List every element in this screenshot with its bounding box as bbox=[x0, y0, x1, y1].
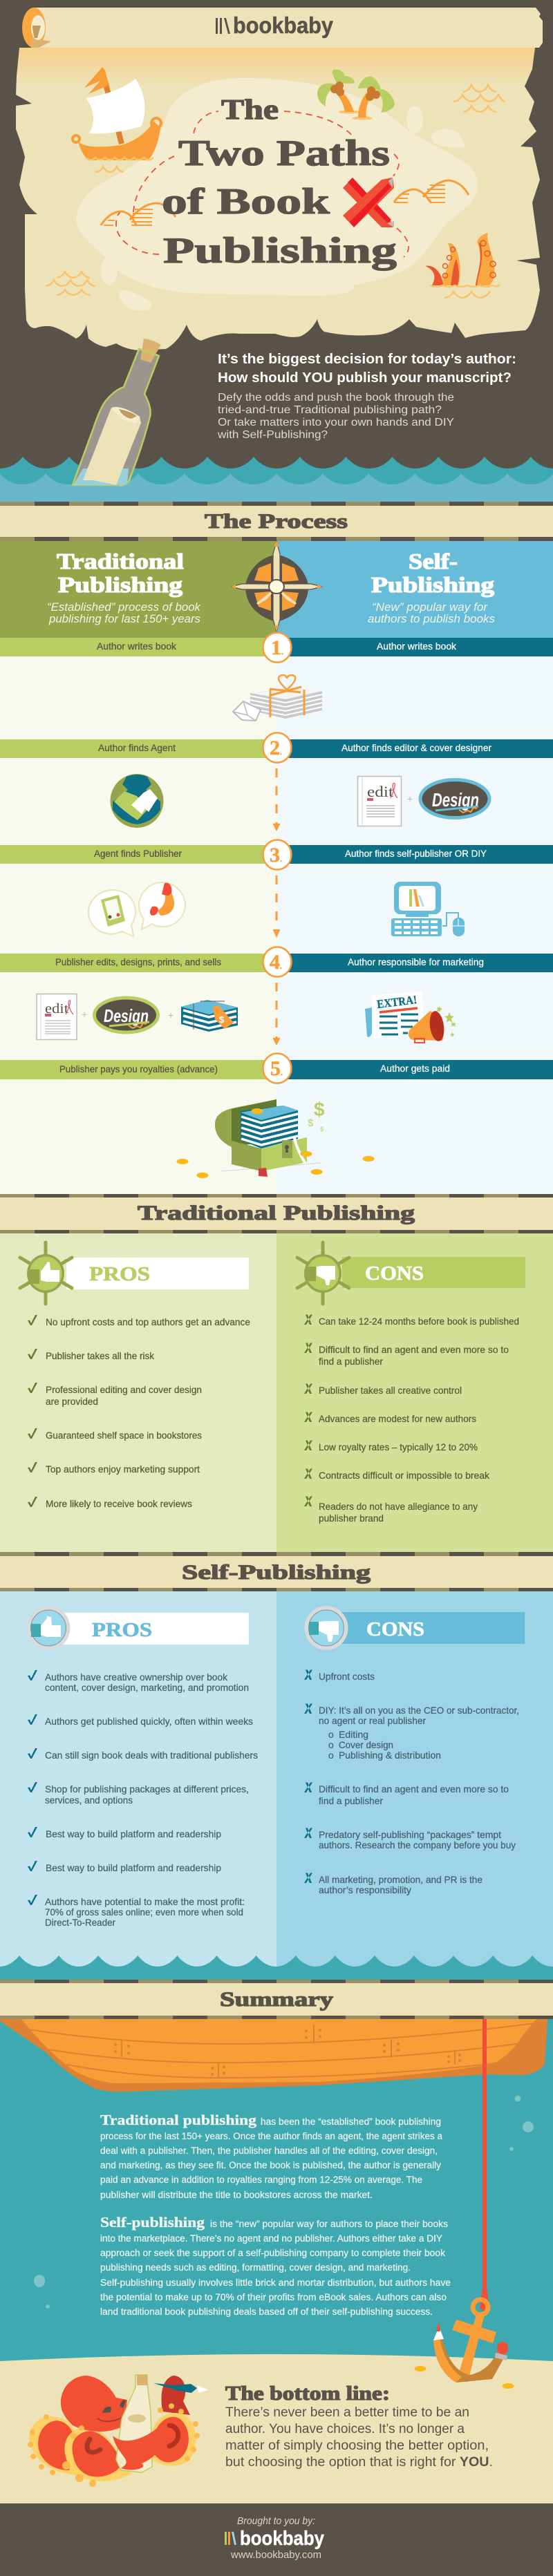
cons ribbon: CONS bbox=[365, 1262, 424, 1285]
con item: author’s responsibility bbox=[319, 1884, 411, 1895]
summary paragraph: self-publishing bbox=[100, 2214, 451, 2317]
icon: treasure chest with books: $ bbox=[314, 1099, 325, 1120]
con item: All marketing, promotion, and PR is the bbox=[319, 1874, 482, 1885]
summary paragraph: self-publishing: publishing needs such as editing, formatting, cover design, and marketing. bbox=[100, 2262, 411, 2273]
con item: Advances are modest for new authors bbox=[319, 1413, 476, 1424]
bottom line text: matter of simply choosing the better option, bbox=[225, 2438, 489, 2453]
cons ribbon: CONS bbox=[366, 1618, 424, 1640]
icon: anchor bbox=[433, 2300, 508, 2383]
step 2: 2. bbox=[270, 737, 282, 759]
banner: Summary bbox=[0, 1983, 553, 2016]
icon: edit page: edit bbox=[367, 783, 393, 800]
pro item: Authors have potential to make the most profit: bbox=[45, 1896, 245, 1907]
pro item: Best way to build platform and readership bbox=[46, 1828, 221, 1839]
pros ribbon: PROS bbox=[92, 1619, 152, 1641]
con item: publisher brand bbox=[319, 1513, 384, 1524]
con item: DIY: It’s all on you as the CEO or sub-contractor, bbox=[319, 1705, 519, 1716]
step 5: Publisher pays you royalties (advance) bbox=[59, 1063, 218, 1074]
icon: boat hull bbox=[0, 2019, 547, 2092]
step 3 bbox=[0, 840, 553, 869]
con item bbox=[304, 1497, 478, 1524]
con item: Publisher takes all creative control bbox=[319, 1385, 462, 1396]
plus: + bbox=[407, 793, 413, 804]
con item: authors. Research the company before you buy bbox=[319, 1839, 516, 1850]
bottom line text: There’s never been a better time to be an bbox=[225, 2405, 469, 2420]
icon: handshake bbox=[111, 774, 163, 828]
scroll top band bbox=[22, 8, 543, 48]
icon: ship wheel thumbs down bbox=[297, 1242, 349, 1304]
icon: porthole thumbs up bbox=[26, 1606, 71, 1650]
intro text block: How should YOU publish your manuscript? bbox=[218, 370, 512, 386]
pro item: Direct-To-Reader bbox=[45, 1917, 115, 1928]
summary paragraph: traditional: and marketing, as they see fit. Once the book is published, the author is generally bbox=[100, 2160, 441, 2170]
icon: design badge green bbox=[94, 998, 158, 1032]
pro item: No upfront costs and top authors get an advance bbox=[46, 1316, 250, 1327]
teal wave footer of self-publishing bbox=[0, 1955, 553, 1980]
step 4 bbox=[0, 947, 553, 977]
panel: traditional header bbox=[0, 541, 276, 638]
cons ribbon bbox=[342, 1257, 525, 1288]
panel: traditional header: “Established” process of book bbox=[47, 601, 201, 614]
icon: design badge: Design bbox=[432, 789, 479, 811]
summary paragraph: traditional: process for the last 150+ years. Once the author finds an agent, the agent strikes a bbox=[100, 2131, 442, 2141]
icon: kraken tentacles bbox=[425, 233, 499, 287]
island bbox=[76, 78, 478, 296]
banner: Summary: Summary bbox=[220, 1988, 333, 2011]
step 2: Author finds Agent bbox=[98, 742, 176, 753]
icon: manuscript with ribbon bbox=[233, 675, 322, 721]
summary paragraph: traditional: paid an advance in addition to royalties ranging from 12-25% on average. The bbox=[100, 2175, 422, 2185]
step 3: Agent finds Publisher bbox=[94, 848, 182, 859]
panel: traditional cons bbox=[276, 1233, 553, 1552]
parchment map bbox=[16, 48, 540, 350]
arrow: dashed 2 to 3 bbox=[273, 768, 280, 831]
brought to you by: Brought to you by: bbox=[237, 2515, 315, 2527]
summary paragraph: traditional bbox=[100, 2112, 442, 2200]
step 1 bbox=[0, 633, 553, 662]
icon: newspaper EXTRA bbox=[365, 991, 424, 1039]
pro item bbox=[28, 1670, 249, 1693]
bottom line text: but choosing the option that is right for YOU. bbox=[225, 2455, 493, 2470]
con item: Publishing & distribution bbox=[339, 1750, 441, 1761]
con item: Predatory self-publishing “packages” tempt bbox=[319, 1829, 501, 1840]
banner: The Process bbox=[0, 506, 553, 537]
step 3: Author finds self-publisher OR DIY bbox=[345, 848, 487, 859]
pro item: Top authors enjoy marketing support bbox=[46, 1464, 200, 1475]
cons ribbon bbox=[339, 1612, 525, 1644]
icon: design badge green: Design bbox=[104, 1005, 149, 1026]
banner: Self-Publishing: Self-Publishing bbox=[182, 1561, 371, 1584]
pro item: More likely to receive book reviews bbox=[46, 1498, 192, 1509]
step 1: Author writes book bbox=[377, 641, 457, 652]
summary paragraph: self-publishing: land traditional book publishing deals based off of their self-publishing success. bbox=[100, 2307, 433, 2317]
icon: palm trees bbox=[317, 70, 395, 120]
main title bbox=[162, 93, 397, 271]
con item: find a publisher bbox=[319, 1356, 383, 1367]
con item bbox=[304, 1704, 519, 1761]
main title: Publishing bbox=[163, 231, 397, 271]
website: www.bookbaby.com bbox=[230, 2549, 321, 2561]
bottom line text bbox=[225, 2383, 493, 2470]
dashed treasure route bbox=[116, 111, 409, 257]
step 2 bbox=[0, 732, 553, 763]
con item: Low royalty rates – typically 12 to 20% bbox=[319, 1441, 478, 1452]
pros ribbon bbox=[66, 1258, 249, 1289]
panel: self-publishing cons bbox=[276, 1591, 553, 1980]
ocean waves bbox=[0, 457, 553, 502]
logo: bookbaby: bookbaby bbox=[233, 12, 334, 38]
panel: self header: “New” popular way for bbox=[372, 601, 489, 614]
panel: traditional header: Traditional bbox=[57, 549, 184, 574]
pro item: Publisher takes all the risk bbox=[46, 1350, 155, 1361]
con item: o bbox=[328, 1729, 334, 1740]
small islets bbox=[101, 106, 465, 311]
con item: o bbox=[328, 1750, 334, 1761]
con item: find a publisher bbox=[319, 1795, 383, 1806]
icon: treasure chest with books bbox=[177, 1099, 375, 1178]
panel: self header bbox=[276, 541, 553, 638]
panel: self-publishing pros bbox=[0, 1591, 276, 1980]
panel: summary teal bbox=[0, 2019, 553, 2365]
icon: octopus bbox=[28, 2375, 208, 2487]
summary paragraph: self-publishing: Self-publishing bbox=[100, 2214, 205, 2231]
pro item: Professional editing and cover design bbox=[46, 1384, 202, 1395]
main title: Two Paths bbox=[178, 133, 390, 173]
step 5 bbox=[0, 1053, 553, 1083]
con item bbox=[304, 1828, 516, 1850]
pro item: Best way to build platform and readership bbox=[46, 1862, 221, 1873]
summary paragraph: self-publishing: into the marketplace. There’s no agent and no publisher. Authors either take a DIY bbox=[100, 2233, 442, 2244]
step 4: 4. bbox=[270, 951, 282, 974]
pro item: Shop for publishing packages at different prices, bbox=[45, 1783, 249, 1794]
pros ribbon bbox=[62, 1613, 249, 1645]
icon: megaphone bbox=[409, 1006, 456, 1043]
pro item: 70% of gross sales online; even more when sold bbox=[45, 1906, 243, 1917]
panel: bottom line sand bbox=[0, 2354, 553, 2503]
icon: treasure chest with books: $ bbox=[320, 1126, 324, 1133]
pro item: are provided bbox=[46, 1396, 98, 1407]
plus: + bbox=[168, 1010, 174, 1021]
con item: Upfront costs bbox=[319, 1671, 375, 1682]
banner: Self-Publishing bbox=[0, 1556, 553, 1588]
con item: Editing bbox=[339, 1729, 368, 1740]
intro text block: Or take matters into your own hands and DIY bbox=[218, 417, 454, 428]
pro item: Guaranteed shelf space in bookstores bbox=[46, 1430, 202, 1441]
banner: Traditional Publishing bbox=[0, 1197, 553, 1230]
step 5: 5. bbox=[270, 1057, 283, 1080]
con item: Can take 12-24 months before book is published bbox=[319, 1316, 519, 1327]
con item bbox=[304, 1873, 482, 1895]
icon: priced books: $ bbox=[219, 1014, 225, 1025]
step 1: Author writes book bbox=[97, 641, 177, 652]
footer logo: bookbaby bbox=[240, 2528, 324, 2550]
main title: The bbox=[221, 93, 279, 125]
icon: compass bbox=[231, 541, 322, 632]
panel: traditional header: publishing for last 150+ years bbox=[48, 613, 200, 625]
banner: Traditional Publishing: Traditional Publishing bbox=[138, 1202, 415, 1224]
icon: edit page small bbox=[37, 994, 77, 1039]
pros ribbon: PROS bbox=[89, 1263, 150, 1285]
con item bbox=[304, 1783, 509, 1806]
step 2: Author finds editor & cover designer bbox=[341, 742, 491, 753]
icon: priced books bbox=[181, 1000, 238, 1032]
panel: self header: authors to publish books bbox=[368, 613, 495, 625]
bubbles bbox=[34, 2095, 534, 2309]
summary paragraph: traditional: deal with a publisher. Then, the publisher handles all of the editing, cover design, bbox=[100, 2146, 438, 2156]
footer panel bbox=[0, 2503, 553, 2576]
panel: self header: Publishing bbox=[371, 572, 494, 597]
summary paragraph: traditional: has been the “established” book publishing bbox=[261, 2116, 441, 2127]
icon: porthole thumbs down bbox=[304, 1606, 348, 1650]
summary paragraph: traditional: Traditional publishing bbox=[100, 2112, 257, 2128]
con item: Difficult to find an agent and even more so to bbox=[319, 1344, 509, 1355]
arrow: dashed 4 to 5 bbox=[273, 983, 280, 1045]
summary paragraph: self-publishing: is the “new” popular way for authors to place their books bbox=[210, 2219, 448, 2229]
con item: no agent or real publisher bbox=[319, 1715, 426, 1726]
con item: Readers do not have allegiance to any bbox=[319, 1501, 478, 1512]
con item bbox=[304, 1343, 509, 1367]
process panels background bbox=[0, 638, 553, 1194]
bottom line text: The bottom line: bbox=[225, 2383, 390, 2405]
panel: self header: Self- bbox=[409, 549, 458, 574]
con item: Cover design bbox=[339, 1739, 393, 1750]
icon: design badge bbox=[420, 779, 489, 818]
step 1: 1. bbox=[271, 636, 283, 659]
icon: viking ship bbox=[73, 67, 161, 160]
pro item: Authors have creative ownership over book bbox=[45, 1671, 228, 1683]
intro text block bbox=[217, 352, 516, 441]
intro text block: with Self-Publishing? bbox=[217, 429, 328, 441]
pro item bbox=[28, 1383, 202, 1407]
panel: traditional pros bbox=[0, 1233, 276, 1552]
pro item: content, cover design, marketing, and promotion bbox=[45, 1682, 249, 1693]
pro item: services, and options bbox=[45, 1794, 133, 1806]
step 5: Author gets paid bbox=[380, 1063, 450, 1074]
pro item bbox=[28, 1895, 245, 1928]
step 4: Author responsible for marketing bbox=[348, 956, 484, 967]
wave ornaments bbox=[46, 85, 505, 298]
icon: newspaper EXTRA: EXTRA! bbox=[376, 993, 418, 1011]
pro item: Can still sign book deals with traditional publishers bbox=[45, 1750, 258, 1761]
summary paragraph: self-publishing: Self-publishing usually involves little brick and mortar distribution, but authors have bbox=[100, 2277, 451, 2288]
pro item: Authors get published quickly, often within weeks bbox=[45, 1716, 253, 1727]
pro item bbox=[28, 1782, 249, 1806]
icon: anchor rope bbox=[480, 2019, 489, 2311]
icon: edit page bbox=[358, 777, 401, 826]
icon: edit page small: edit bbox=[45, 1001, 68, 1016]
intro text block: Defy the odds and push the book through the bbox=[218, 392, 454, 404]
intro text block: It’s the biggest decision for today’s author: bbox=[218, 352, 516, 367]
con item: o bbox=[328, 1739, 334, 1750]
icon: X of crossed pencils bbox=[343, 178, 394, 227]
con item: Difficult to find an agent and even more so to bbox=[319, 1783, 509, 1794]
icon: computer bbox=[391, 882, 465, 936]
icon: gold coins bbox=[415, 2366, 514, 2389]
bottom line text: author. You have choices. It’s no longer a bbox=[225, 2422, 465, 2436]
banner: The Process: The Process bbox=[205, 510, 348, 533]
plus: + bbox=[82, 1009, 87, 1020]
step 3: 3. bbox=[270, 844, 282, 866]
icon: phone call bubbles bbox=[88, 882, 185, 936]
panel: traditional header: Publishing bbox=[58, 572, 182, 597]
scroll roll bbox=[22, 8, 51, 48]
summary paragraph: self-publishing: approach or seek the support of a self-publishing company to complete their book bbox=[100, 2248, 445, 2258]
summary paragraph: traditional: publisher will distribute the title to bookstores across the market. bbox=[100, 2190, 373, 2200]
icon: ship wheel thumbs up bbox=[20, 1242, 72, 1304]
summary paragraph: self-publishing: the potential to make up to 70% of their profits from eBook sales. Authors can also bbox=[100, 2292, 447, 2302]
step 4: Publisher edits, designs, prints, and sells bbox=[55, 956, 221, 967]
arrow: dashed 3 to 4 bbox=[273, 875, 280, 937]
icon: message in a bottle bbox=[73, 339, 161, 486]
icon: treasure chest with books: $ bbox=[308, 1117, 314, 1129]
con item: Contracts difficult or impossible to break bbox=[319, 1470, 490, 1481]
main title: of Book bbox=[162, 182, 330, 222]
icon: mountains bbox=[101, 180, 469, 226]
intro text block: tried-and-true Traditional publishing path? bbox=[218, 404, 442, 416]
